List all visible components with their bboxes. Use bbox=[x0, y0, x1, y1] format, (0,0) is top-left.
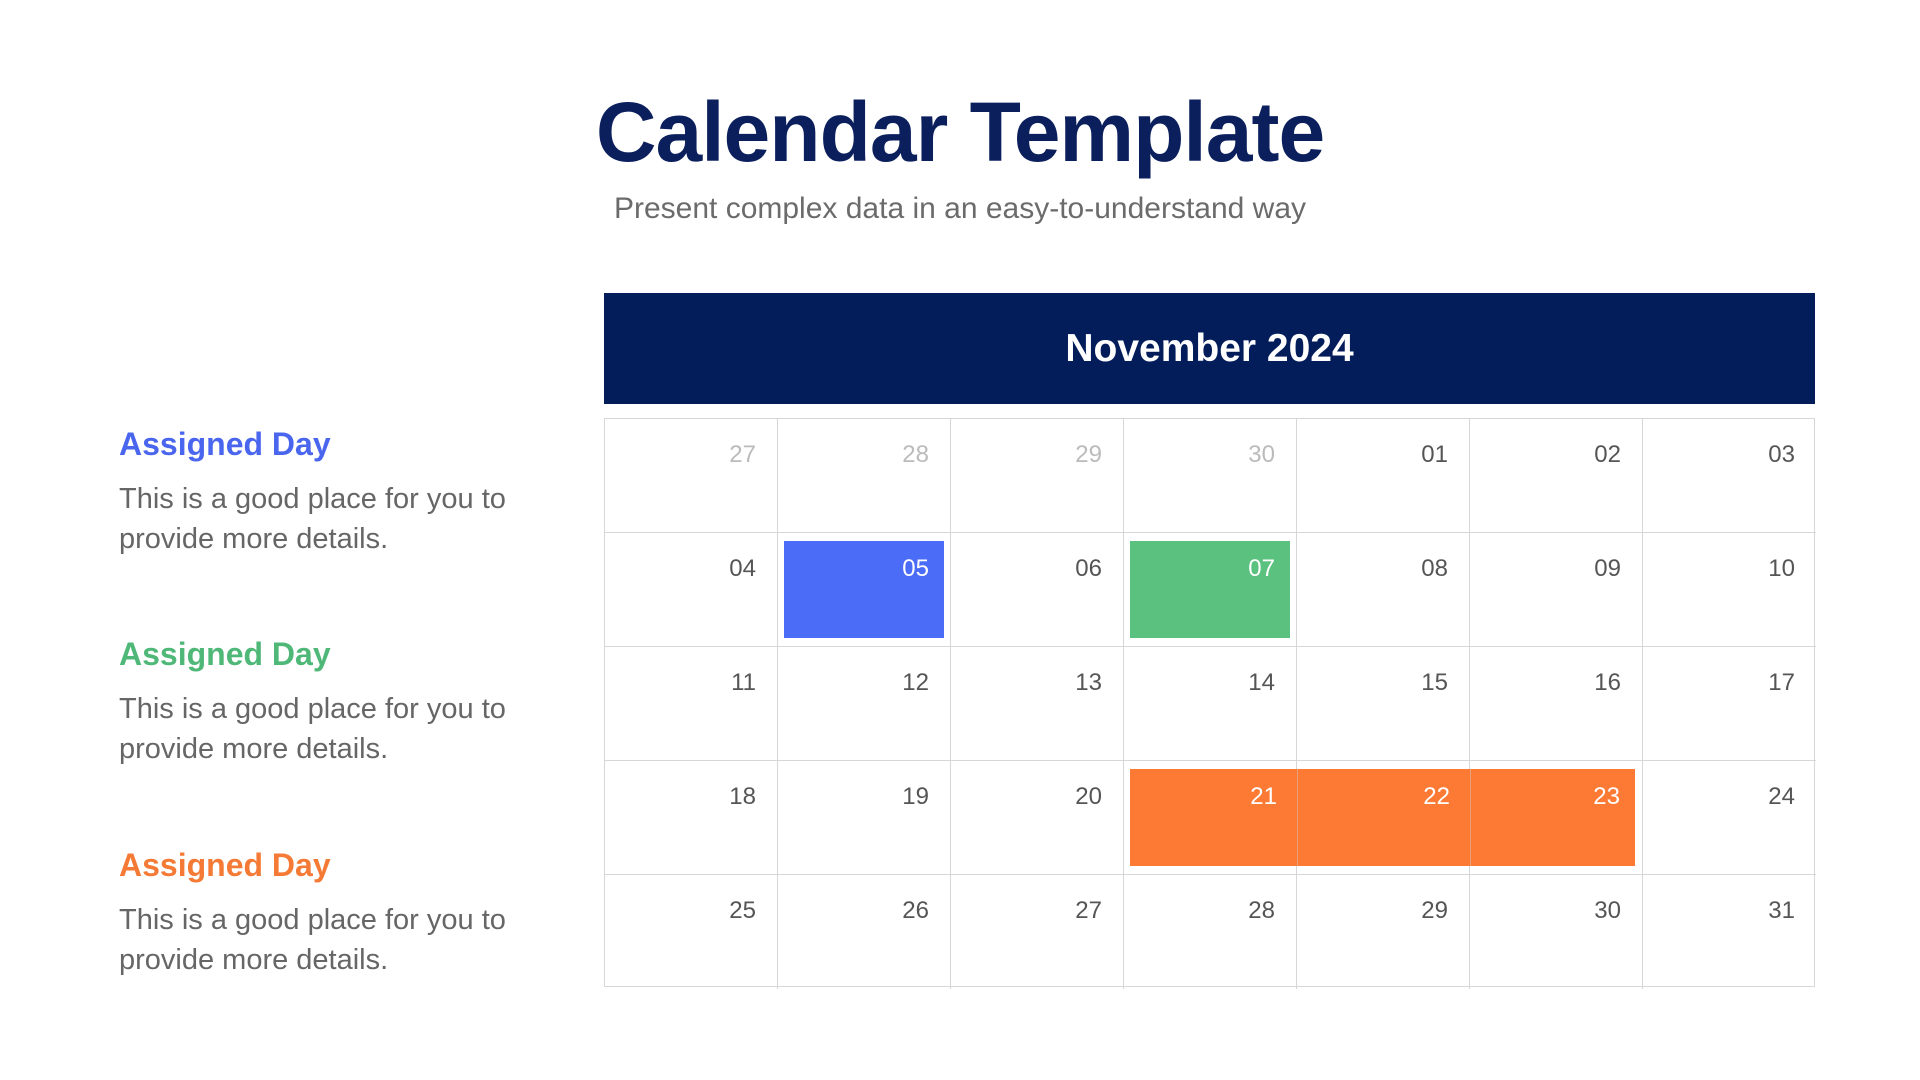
calendar grid: 07 bbox=[1248, 555, 1275, 582]
calendar grid: 09 bbox=[1594, 555, 1621, 582]
calendar grid: 02 bbox=[1594, 441, 1621, 468]
calendar grid: 15 bbox=[1421, 669, 1448, 696]
subtitle: Present complex data in an easy-to-understand way bbox=[614, 192, 1306, 225]
title: Calendar Template bbox=[596, 85, 1324, 179]
calendar grid: 17 bbox=[1768, 669, 1795, 696]
calendar grid: 29 bbox=[1421, 897, 1448, 924]
calendar grid: 12 bbox=[902, 669, 929, 696]
calendar grid: 03 bbox=[1768, 441, 1795, 468]
calendar header bbox=[604, 293, 1815, 404]
calendar grid: 04 bbox=[729, 555, 756, 582]
calendar grid: 25 bbox=[729, 897, 756, 924]
orange highlight 21-23: 23 bbox=[1593, 783, 1620, 810]
legend: green: This is a good place for you to provide more details. bbox=[119, 693, 506, 765]
legend: blue bbox=[119, 426, 506, 555]
orange highlight 21-23: 22 bbox=[1423, 783, 1450, 810]
calendar grid: 24 bbox=[1768, 783, 1795, 810]
calendar grid: 14 bbox=[1248, 669, 1275, 696]
calendar grid: 26 bbox=[902, 897, 929, 924]
calendar grid: 01 bbox=[1421, 441, 1448, 468]
legend: green: Assigned Day bbox=[119, 636, 331, 672]
calendar grid: 06 bbox=[1075, 555, 1102, 582]
calendar grid bbox=[604, 418, 1815, 987]
calendar grid: 31 bbox=[1768, 897, 1795, 924]
legend: blue: Assigned Day bbox=[119, 426, 331, 462]
calendar grid: 16 bbox=[1594, 669, 1621, 696]
legend: green bbox=[119, 636, 506, 765]
orange highlight 21-23: 21 bbox=[1250, 783, 1277, 810]
legend: orange: This is a good place for you to provide more details. bbox=[119, 904, 506, 976]
calendar grid: 28 bbox=[1248, 897, 1275, 924]
calendar header: November 2024 bbox=[1065, 326, 1354, 370]
legend: orange bbox=[119, 847, 506, 976]
calendar grid: 20 bbox=[1075, 783, 1102, 810]
calendar grid: 05 bbox=[902, 555, 929, 582]
calendar grid: 13 bbox=[1075, 669, 1102, 696]
calendar grid: 11 bbox=[731, 669, 756, 696]
calendar grid: 27 bbox=[1075, 897, 1102, 924]
calendar grid: 28 bbox=[902, 441, 929, 468]
calendar grid: 29 bbox=[1075, 441, 1102, 468]
calendar grid: 18 bbox=[729, 783, 756, 810]
orange highlight 21-23 bbox=[1130, 769, 1635, 866]
legend: blue: This is a good place for you to provide more details. bbox=[119, 483, 506, 555]
calendar grid: 30 bbox=[1594, 897, 1621, 924]
calendar grid: 08 bbox=[1421, 555, 1448, 582]
calendar grid: 30 bbox=[1248, 441, 1275, 468]
calendar grid: 19 bbox=[902, 783, 929, 810]
legend: orange: Assigned Day bbox=[119, 847, 331, 883]
calendar grid: 27 bbox=[729, 441, 756, 468]
calendar grid: 10 bbox=[1768, 555, 1795, 582]
